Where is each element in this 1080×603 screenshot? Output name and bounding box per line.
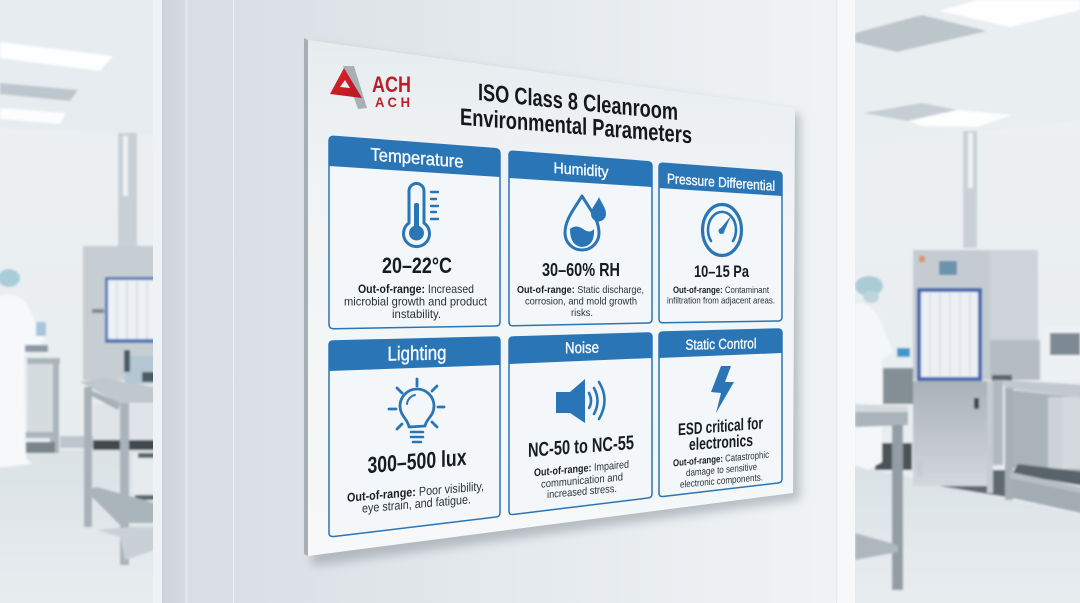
panel: pressure differential: Pressure Differential <box>667 170 775 194</box>
humidity out-of-range text: corrosion, and mold growth <box>525 296 637 308</box>
panel: lighting <box>329 337 500 537</box>
lighting out-of-range text: Out-of-range: Poor visibility, <box>347 479 484 505</box>
noise out-of-range text <box>534 459 629 501</box>
panel: lighting: 300–500 lux <box>368 444 467 478</box>
icon: pressure gauge <box>702 204 742 256</box>
humidity out-of-range text: risks. <box>571 307 593 319</box>
sign board <box>304 38 795 556</box>
static value <box>678 414 763 454</box>
panel: pressure differential <box>659 163 782 323</box>
temperature out-of-range text <box>344 282 488 321</box>
panel: noise: Noise <box>565 340 599 357</box>
panel: temperature <box>329 136 500 329</box>
panel: humidity <box>509 151 652 326</box>
temperature out-of-range text: microbial growth and product <box>344 294 488 308</box>
static out-of-range text: electronic components. <box>680 472 763 491</box>
lighting out-of-range text: eye strain, and fatigue. <box>362 492 471 516</box>
logo: A C H <box>375 94 410 110</box>
humidity out-of-range text <box>517 284 644 319</box>
title <box>460 79 692 149</box>
noise out-of-range text: communication and <box>541 471 623 491</box>
static out-of-range text: damage to sensitive <box>686 462 757 479</box>
panel: noise: NC-50 to NC-55 <box>528 432 634 462</box>
noise out-of-range text: Out-of-range: Impaired <box>534 459 629 479</box>
pressure out-of-range text <box>667 285 775 306</box>
pressure out-of-range text: Out-of-range: Contaminant <box>673 285 769 296</box>
panel: temperature: Temperature <box>370 144 464 172</box>
panel: noise <box>509 333 652 515</box>
static value: electronics <box>689 431 753 454</box>
static out-of-range text <box>673 450 769 491</box>
panel: static control: Static Control <box>686 336 756 354</box>
title: Environmental Parameters <box>460 104 692 149</box>
panel: static control <box>659 329 782 497</box>
wall panel seams <box>153 0 855 603</box>
panel: lighting: Lighting <box>388 342 446 366</box>
left room background <box>0 0 155 603</box>
panel: humidity: Humidity <box>554 160 609 181</box>
board drop shadow <box>312 45 800 566</box>
icon: thermometer <box>404 184 438 247</box>
right room background <box>853 0 1080 603</box>
logo: ACH <box>372 72 411 97</box>
icon: light bulb <box>389 379 444 442</box>
lighting out-of-range text <box>347 479 484 516</box>
temperature out-of-range text: instability. <box>392 307 441 321</box>
pressure out-of-range text: infiltration from adjacent areas. <box>667 296 775 306</box>
temperature out-of-range text: Out-of-range: Increased <box>358 282 474 296</box>
logo <box>330 66 411 110</box>
title: ISO Class 8 Cleanroom <box>478 79 678 126</box>
static value: ESD critical for <box>678 414 763 439</box>
icon: speaker <box>556 379 604 423</box>
panel: humidity: 30–60% RH <box>542 259 620 280</box>
panel: pressure differential: 10–15 Pa <box>694 262 749 281</box>
icon: water drops <box>565 196 606 250</box>
panel: temperature: 20–22°C <box>382 253 452 278</box>
foreground wall <box>153 0 855 603</box>
noise out-of-range text: increased stress. <box>547 483 617 501</box>
static out-of-range text: Out-of-range: Catastrophic <box>673 450 769 469</box>
icon: lightning bolt <box>711 366 734 413</box>
humidity out-of-range text: Out-of-range: Static discharge, <box>517 284 644 296</box>
